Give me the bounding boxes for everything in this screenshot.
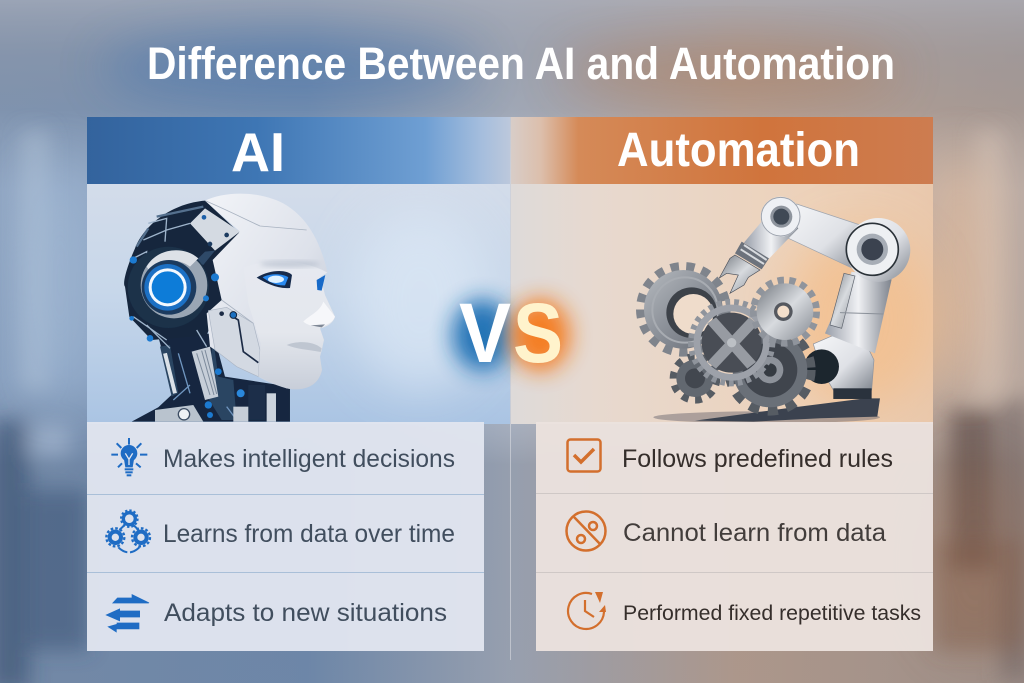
warm glow in Automation panel	[785, 230, 935, 410]
row: Follows predefined rules	[568, 440, 893, 473]
icon: prohibited	[566, 512, 606, 550]
gear: large rear	[641, 267, 726, 352]
text: Learns from data over time	[163, 520, 455, 548]
base plate	[695, 398, 880, 422]
icon: light bulb	[111, 438, 147, 476]
header: Automation: Automation	[617, 124, 860, 177]
text: Makes intelligent decisions	[163, 445, 455, 473]
brow shading	[260, 261, 320, 267]
gear: centre with cross spokes	[692, 303, 772, 383]
row: Adapts to new situations	[105, 594, 447, 633]
arm: forearm	[785, 204, 863, 273]
VS badge: V	[459, 286, 511, 380]
divider line between columns	[510, 117, 511, 660]
jaw plate	[208, 307, 260, 377]
joint: wrist	[761, 197, 801, 237]
row: Cannot learn from data	[566, 512, 886, 550]
gear: rear lower	[729, 329, 811, 411]
eyes	[257, 271, 292, 288]
arm: upper segment	[825, 272, 892, 353]
arm: lower body	[813, 334, 874, 390]
face seams	[205, 201, 307, 323]
window glow in AI panel	[350, 210, 490, 390]
row: Performed fixed repetitive tasks	[568, 592, 921, 629]
wrist and gripper	[735, 242, 769, 269]
panel body: AI	[87, 184, 510, 424]
glowing ear ring	[128, 247, 209, 328]
header: Automation	[511, 117, 933, 184]
illustration: robot head	[124, 194, 335, 422]
header: AI	[87, 117, 510, 184]
VS badge	[452, 286, 570, 380]
text: Follows predefined rules	[622, 445, 893, 473]
list: AI features	[87, 422, 484, 651]
text: Performed fixed repetitive tasks	[623, 601, 921, 625]
gear: small front	[754, 280, 816, 343]
title: Difference Between AI and Automation	[147, 38, 895, 89]
illustration: robot arm with gears	[641, 197, 910, 423]
row: Makes intelligent decisions	[111, 438, 455, 476]
text: Adapts to new situations	[164, 599, 447, 627]
icon: swap arrows	[105, 594, 149, 633]
text: Cannot learn from data	[623, 519, 886, 547]
neck machinery	[132, 333, 290, 422]
joint: elbow	[846, 218, 910, 282]
VS badge: S	[513, 286, 563, 380]
mouth	[287, 342, 322, 352]
panel body: Automation	[511, 184, 933, 424]
icon: clock with arrows	[568, 592, 606, 629]
icon: connected gears	[106, 510, 150, 552]
shadow base	[653, 411, 880, 423]
front face mask	[243, 262, 335, 389]
panel: AI	[87, 117, 935, 660]
list: Automation features	[536, 422, 933, 651]
white face shell	[205, 194, 335, 389]
nose highlight	[303, 302, 335, 326]
icon: checkbox	[568, 440, 600, 472]
blue connectors	[130, 256, 137, 264]
row: Learns from data over time	[106, 510, 455, 552]
header: AI: AI	[231, 121, 285, 183]
gear: small lower	[674, 357, 716, 400]
back of skull machinery	[124, 201, 240, 340]
